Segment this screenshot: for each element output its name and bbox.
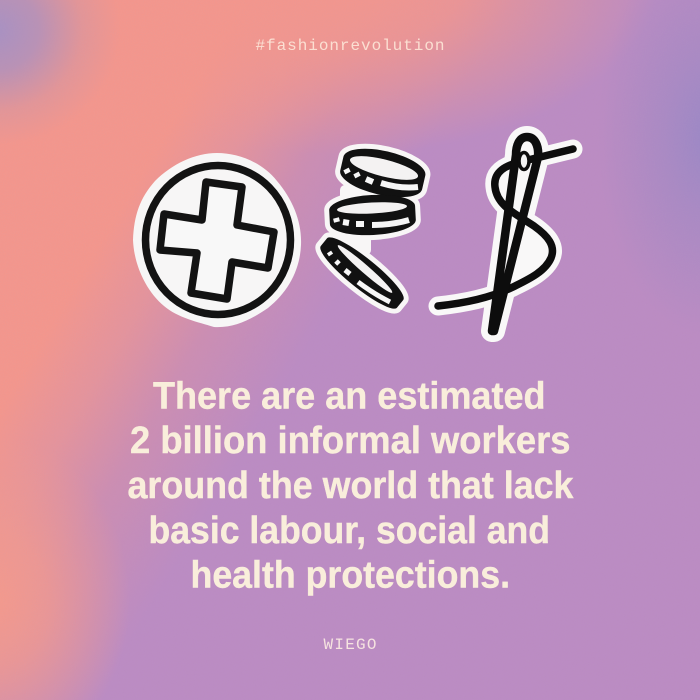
main statement: 2 billion informal workers: [130, 420, 570, 462]
hashtag heading: #fashionrevolution: [256, 37, 444, 55]
icon: needle and thread dollar sign: [438, 137, 573, 331]
icon: stack of coins: [314, 142, 429, 315]
middle coin: [329, 193, 416, 237]
main statement: health protections.: [190, 554, 510, 596]
thread: [438, 149, 573, 306]
coin sticker backing: [314, 142, 429, 315]
main statement: around the world that lack: [128, 465, 574, 507]
bottom coin: [314, 231, 410, 315]
needle: [492, 137, 538, 331]
needle eye: [519, 152, 529, 170]
icon: medical cross in circle: [133, 153, 301, 327]
main statement: [128, 376, 574, 596]
sticker backing: [438, 137, 573, 331]
main statement: There are an estimated: [153, 376, 546, 418]
source label: WIEGO: [324, 636, 376, 654]
top coin: [337, 142, 429, 204]
main statement: basic labour, social and: [148, 510, 550, 552]
